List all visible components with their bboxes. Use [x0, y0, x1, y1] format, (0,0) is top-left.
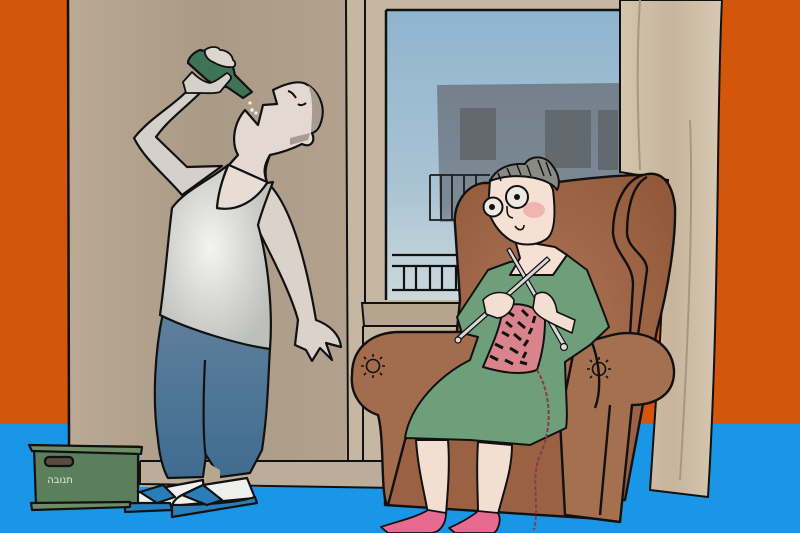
pants: [155, 313, 270, 478]
knitting: [483, 304, 545, 373]
stubble: [290, 85, 321, 145]
yarn: [534, 370, 549, 530]
window sill: [362, 303, 480, 326]
liquid drops: [248, 101, 258, 115]
hair and bun: [490, 157, 559, 190]
right foot: [172, 478, 257, 517]
neckline skin: [510, 240, 567, 275]
crate logo: תנובה: [47, 475, 73, 486]
curtain: [620, 0, 722, 497]
ankle: [206, 462, 220, 486]
hand under bottle: [183, 72, 231, 93]
feet and sandals: [125, 478, 257, 517]
armchair: [352, 174, 675, 522]
man drinking: [134, 47, 341, 486]
background: blue floor: [0, 424, 800, 533]
right arm: [256, 183, 341, 361]
bottle: [188, 50, 252, 98]
shoes: [381, 510, 500, 533]
legs: [416, 440, 512, 514]
torso and tank top: [160, 165, 273, 349]
fingers on bottle: [205, 47, 235, 67]
crate: [29, 445, 142, 510]
window glass with view: [386, 10, 622, 300]
head: [229, 82, 323, 182]
balcony railing: [392, 255, 470, 290]
raised arm: [134, 92, 222, 195]
glasses: [484, 186, 528, 216]
chair buttons: [361, 354, 611, 381]
woman knitting: [381, 157, 609, 533]
head: [488, 170, 554, 244]
building outside: [437, 83, 622, 258]
left foot: [125, 480, 205, 512]
dress and skirt: [405, 255, 609, 445]
room wall: [68, 0, 625, 488]
hands: [483, 292, 575, 333]
needles: [457, 248, 566, 346]
background: orange wall: [0, 0, 800, 426]
